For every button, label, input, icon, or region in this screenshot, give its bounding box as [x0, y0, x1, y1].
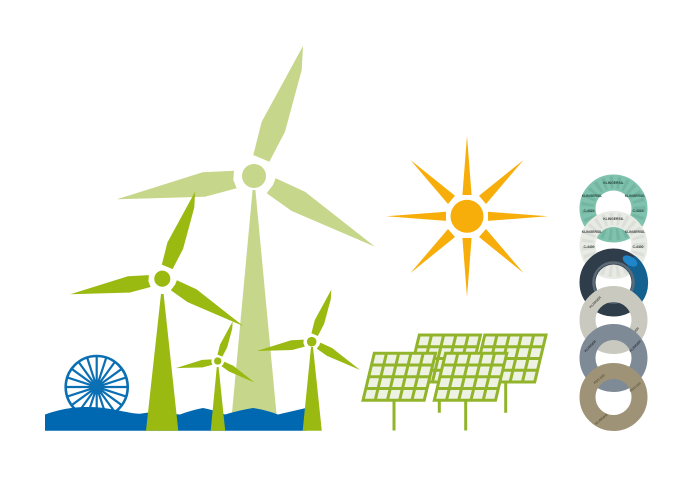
teal gasket: KLINGERSIL — [582, 194, 602, 198]
white gasket: KLINGERSIL — [625, 230, 645, 234]
white gasket: KLINGERSIL — [582, 230, 602, 234]
teal gasket: C-4324 — [632, 209, 644, 213]
tan gasket — [588, 371, 642, 426]
water waves — [45, 407, 306, 431]
dark and blue gasket — [588, 253, 640, 308]
sun — [386, 136, 548, 297]
teal gasket: C-4324 — [583, 209, 595, 213]
slate grey gasket — [583, 332, 642, 384]
slate grey gasket: KLINGER — [583, 339, 597, 353]
light grey gasket — [588, 294, 640, 346]
tan gasket: PSS 200 — [629, 381, 642, 393]
white gasket — [582, 217, 645, 271]
back left solar panel — [408, 335, 480, 382]
light grey gasket: KLINGER — [588, 295, 602, 309]
teal gasket: KLINGERSIL — [603, 181, 624, 185]
teal gasket — [582, 181, 645, 234]
front right solar panel — [434, 353, 507, 400]
light grey gasket: KLINGER — [626, 326, 640, 340]
right bright wind turbine — [257, 290, 360, 431]
water wheel — [66, 356, 128, 418]
white gasket: KLINGERSIL — [603, 217, 624, 221]
front left solar panel — [363, 353, 436, 400]
white gasket: C-4400 — [632, 245, 644, 249]
slate grey gasket: KLINGER — [628, 339, 642, 353]
large pale wind turbine — [117, 46, 375, 416]
teal gasket: KLINGERSIL — [625, 194, 645, 198]
small bright wind turbine — [176, 321, 255, 431]
blue highlight patch — [621, 253, 639, 269]
tan gasket: PSS 200 — [593, 373, 606, 385]
medium bright wind turbine — [70, 192, 243, 431]
stack of gasket rings — [582, 181, 645, 426]
panel supports — [394, 380, 506, 430]
solar panel array — [363, 335, 546, 430]
white gasket: C-4400 — [583, 245, 595, 249]
back right solar panel — [474, 335, 546, 382]
tan gasket: KLINGER — [594, 412, 609, 426]
